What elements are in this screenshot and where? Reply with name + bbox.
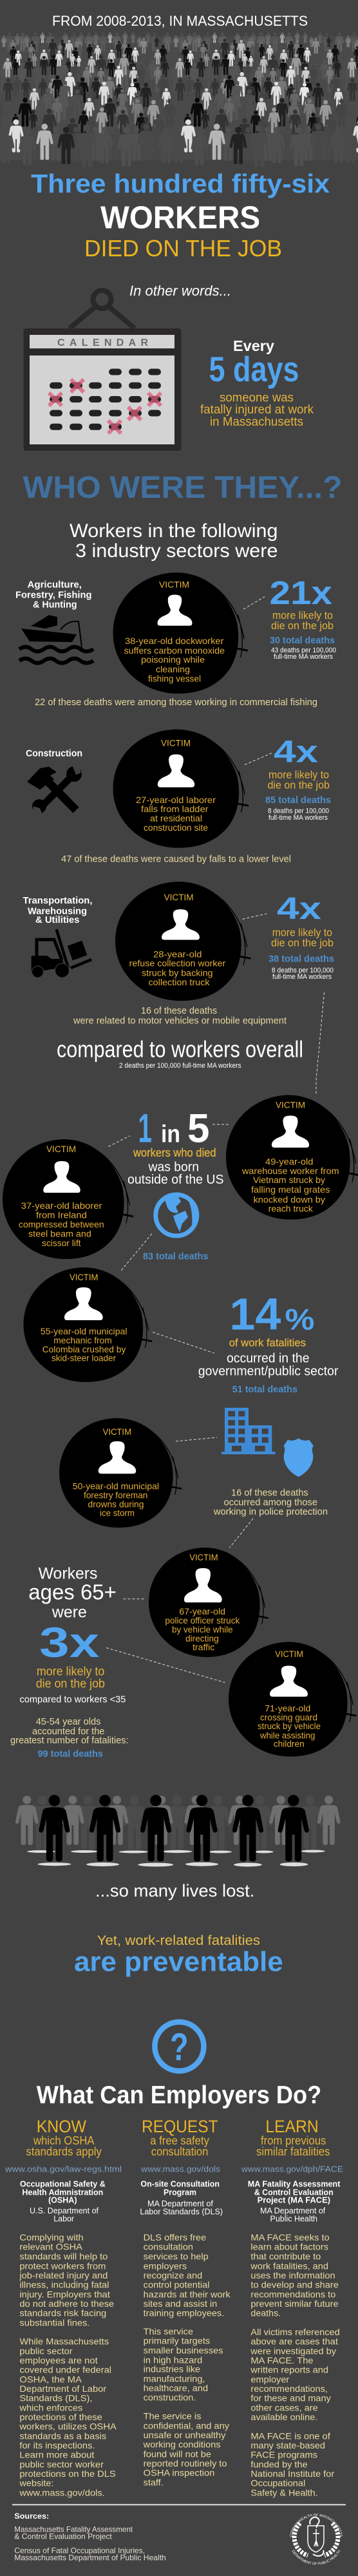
panel: victim warehouse worker: Vietnam struck by <box>253 1175 325 1185</box>
text: OSHA body copy: public sector <box>19 2345 73 2356</box>
text: DLS body copy: healthcare, and <box>144 2383 208 2393</box>
stat: 1 in 5 workers born outside the US: in <box>161 1121 180 1148</box>
heading: from 2008-2013: FROM 2008-2013, IN MASSACHUSETTS <box>52 13 308 29</box>
stat: 1 in 5 workers born outside the US: 1 <box>138 1106 152 1151</box>
stat: 14 percent public sector <box>198 1289 339 1395</box>
text: MA FACE body copy: prevent similar future <box>250 2298 339 2309</box>
text: sources: Massachusetts Fatality Assessment <box>14 2524 133 2533</box>
text: DLS body copy: found will not be <box>144 2448 211 2459</box>
panel: request free safety consultation: REQUEST <box>142 2117 218 2136</box>
stat: 4x transportation: full-time MA workers <box>272 973 332 981</box>
panel: learn from previous fatalities: similar fatalities <box>256 2145 330 2158</box>
stat: 1 in 5 workers born outside the US: 5 <box>187 1106 210 1151</box>
text: OSHA body copy: employees are not <box>19 2355 98 2365</box>
text: OSHA body copy: standards risk facing <box>19 2308 106 2318</box>
text: OSHA body copy <box>19 2232 117 2497</box>
heading: workers in the following 3 industry sectors were: Workers in the following <box>70 520 278 542</box>
panel: victim warehouse worker: VICTIM <box>276 1100 305 1110</box>
panel: victim crossing guard <box>229 1642 357 1757</box>
text: MA FACE body copy: FACE programs <box>250 2450 317 2460</box>
panel: learn from previous fatalities: www.mass.gov/dph/FACE <box>241 2164 343 2174</box>
panel: victim police officer: by vehicle while <box>172 1624 233 1634</box>
label: construction: Construction <box>26 748 82 759</box>
stat: 4x construction: 8 deaths per 100,000 <box>268 808 329 815</box>
text: OSHA body copy: relevant OSHA <box>19 2242 83 2252</box>
panel: victim refuse collector: 28-year-old <box>153 949 202 960</box>
panel: learn from previous fatalities: MA Department of <box>260 2206 326 2215</box>
text: DLS body copy: hazards at their work <box>144 2289 231 2299</box>
panel: request free safety consultation: a free safety <box>150 2134 209 2147</box>
text: DLS body copy: control potential <box>144 2280 210 2290</box>
panel: victim dockworker: fishing vessel <box>148 674 201 684</box>
panel: victim municipal mechanic: Colombia crushed by <box>42 1344 126 1354</box>
text: MA FACE body copy: for these and many <box>250 2393 331 2403</box>
text: sources: Census of Fatal Occupational Injuries, <box>14 2546 145 2555</box>
stat: 4x transportation: 8 deaths per 100,000 <box>272 967 334 974</box>
panel: victim crossing guard: 71-year-old <box>265 1703 310 1713</box>
illustration: row of standing figures <box>15 1795 340 1866</box>
panel: victim municipal mechanic: VICTIM <box>70 1273 98 1282</box>
stat: workers ages 65+ were 3x: Workers <box>39 1565 97 1583</box>
panel: victim police officer <box>149 1548 268 1657</box>
text: in other words: In other words... <box>129 283 231 299</box>
panel: victim laborer: VICTIM <box>161 738 191 748</box>
panel: victim laborer: construction site <box>144 822 208 833</box>
panel: victim crossing guard: crossing guard <box>260 1712 317 1722</box>
stat: workers ages 65+ were 3x: were <box>52 1603 87 1621</box>
panel: request free safety consultation: On-site Consultation <box>140 2180 220 2189</box>
panel: know OSHA standards: Labor <box>53 2215 74 2224</box>
text: OSHA body copy: www.mass.gov/dols. <box>19 2487 105 2497</box>
panel: victim laborer from Ireland <box>3 1139 133 1259</box>
text: MA FACE body copy: Occupational <box>250 2478 305 2488</box>
label: agriculture, forestry, fishing and hunting: Forestry, Fishing <box>15 590 91 601</box>
callout: every 5 days: in Massachusetts <box>210 415 303 429</box>
panel: victim forestry foreman: 50-year-old municipal <box>73 1481 159 1492</box>
text: OSHA body copy: which enforces <box>19 2402 82 2412</box>
text: DLS body copy: OSHA inspection <box>144 2468 214 2478</box>
heading: compared to workers overall <box>57 1036 303 1070</box>
text: DLS body copy: construction. <box>144 2392 196 2403</box>
text: motor vehicle note: were related to motor vehicles or mobile equipment <box>73 1015 287 1026</box>
panel: victim refuse collector: collection truck <box>148 977 211 987</box>
panel: know OSHA standards: standards apply <box>26 2145 102 2158</box>
text: OSHA body copy: OSHA, the MA <box>19 2374 82 2384</box>
text: MA FACE body copy: to develop and share <box>250 2280 339 2290</box>
arrow: dashed connector <box>245 753 272 765</box>
text: OSHA body copy: protections on the DLS <box>19 2468 116 2479</box>
heading: who were they: WHO WERE THEY...? <box>23 471 343 505</box>
arrow: dashed connector <box>229 1519 253 1548</box>
panel: victim police officer: VICTIM <box>189 1553 218 1562</box>
stat: 1 in 5 workers born outside the US: was born <box>148 1160 199 1175</box>
text: police protection note: occurred among those <box>224 1497 317 1508</box>
panel: victim refuse collector: struck by backing <box>142 967 212 978</box>
panel: learn from previous fatalities: Public Health <box>270 2215 317 2224</box>
panel: victim laborer from Ireland: steel beam and <box>28 1228 91 1238</box>
title: three hundred fifty-six workers died on the job: WORKERS <box>100 201 260 236</box>
panel: victim police officer: 67-year-old <box>179 1606 225 1616</box>
panel: know OSHA standards: U.S. Department of <box>30 2206 99 2215</box>
stat: 21x more likely <box>269 574 336 661</box>
icon: question mark circle <box>155 2022 203 2071</box>
panel: victim refuse collector: refuse collection worker <box>129 958 226 969</box>
stat: 4x transportation: 4x <box>277 892 321 926</box>
label: agriculture, forestry, fishing and hunting <box>15 580 91 611</box>
stat: workers ages 65+ were 3x: compared to workers <35 <box>19 1694 126 1705</box>
text: MA FACE body copy: available online. <box>250 2412 317 2422</box>
text: falls note: 47 of these deaths were caused by falls to a lower level <box>61 854 291 864</box>
panel: victim warehouse worker: warehouse worker from <box>241 1166 339 1176</box>
text: DLS body copy: consultation <box>144 2242 193 2252</box>
label: transportation, warehousing and utilities: Transportation, <box>23 895 93 906</box>
text: OSHA body copy: injury. Employers that <box>19 2289 110 2299</box>
panel: request free safety consultation: www.mass.gov/dols <box>140 2164 221 2174</box>
panel: victim dockworker: 38-year-old dockworker <box>125 636 224 646</box>
text: OSHA body copy: illness, including fatal <box>19 2280 109 2290</box>
stat: 4x transportation: more likely to <box>272 926 332 938</box>
panel: victim laborer from Ireland: 37-year-old laborer <box>21 1200 102 1211</box>
panel: know OSHA standards <box>5 2117 122 2497</box>
panel: learn from previous fatalities: MA Fatality Assessment <box>248 2180 341 2189</box>
heading: compared to workers overall: compared to workers overall <box>57 1036 303 1063</box>
panel: victim dockworker <box>113 573 248 694</box>
text: motor vehicle note: 16 of these deaths <box>141 1005 217 1016</box>
text: police protection note: working in police protection <box>213 1506 328 1517</box>
illustration: crowd of workers <box>0 28 358 167</box>
stat: 14 percent public sector: 14 <box>229 1289 281 1340</box>
callout: every 5 days: Every <box>233 337 274 354</box>
text: DLS body copy: staff. <box>144 2477 164 2487</box>
stat: 1 in 5 workers born outside the US: workers who died <box>133 1146 216 1159</box>
stat: workers ages 65+ were 3x: 45-54 year olds <box>36 1716 100 1727</box>
panel: learn from previous fatalities <box>241 2117 343 2497</box>
text: MA FACE body copy: funded by the <box>250 2459 308 2469</box>
stat: workers ages 65+ were 3x: 3x <box>39 1618 100 1666</box>
panel: learn from previous fatalities: LEARN <box>265 2117 319 2136</box>
stat: 4x construction <box>265 735 331 822</box>
text: MA FACE body copy: All victims referenced <box>250 2327 340 2337</box>
panel: victim municipal mechanic <box>23 1267 152 1382</box>
text: so many lives lost: ...so many lives lost. <box>95 1881 254 1900</box>
label: agriculture, forestry, fishing and hunting: & Hunting <box>33 600 77 611</box>
text: OSHA body copy: substantial fines. <box>19 2317 90 2327</box>
text: OSHA body copy: standards will help to <box>19 2251 108 2261</box>
text: sources: Sources: <box>14 2512 49 2521</box>
icon: globe <box>156 1193 197 1236</box>
stat: workers ages 65+ were 3x: accounted for the <box>32 1726 104 1737</box>
text: DLS body copy: sites and assist in <box>144 2298 217 2309</box>
panel: victim crossing guard: while assisting <box>259 1730 315 1740</box>
text: MA FACE body copy: other cases, are <box>250 2402 318 2412</box>
icon: fishing boat <box>19 615 93 663</box>
icon: department of public health seal <box>290 2514 343 2565</box>
icon: government building <box>221 1408 276 1454</box>
panel: know OSHA standards: www.osha.gov/law-regs.html <box>5 2164 122 2174</box>
icon: forklift <box>32 929 91 978</box>
stat: 1 in 5 workers born outside the US: outside of the US <box>127 1173 224 1187</box>
panel: victim forestry foreman: forestry foreman <box>84 1490 147 1500</box>
heading: what can employers do: What Can Employers Do? <box>37 2081 321 2109</box>
text: OSHA body copy: protections of these <box>19 2412 102 2422</box>
panel: victim dockworker: suffers carbon monoxide <box>124 645 225 656</box>
icon: department of public health seal: COMMONWEALTH OF MASSACHUSETTS <box>290 2514 343 2537</box>
stat: 1 in 5 workers born outside the US <box>127 1106 224 1187</box>
text: MA FACE body copy: were investigated by <box>250 2345 336 2356</box>
stat: 21x more likely: full-time MA workers <box>274 653 333 661</box>
panel: learn from previous fatalities: & Control Evaluation <box>254 2188 334 2197</box>
panel: victim dockworker: poisoning while <box>141 654 205 665</box>
stat: 14 percent public sector: % <box>285 1303 314 1336</box>
icon: wall calendar <box>23 290 182 451</box>
text: OSHA body copy: Standards (DLS), <box>19 2393 92 2403</box>
text: MA FACE body copy: MA FACE is one of <box>250 2430 330 2441</box>
text: MA FACE body copy: National Institute for <box>250 2468 335 2479</box>
panel: victim warehouse worker: 49-year-old <box>265 1157 313 1167</box>
panel: know OSHA standards: Health Admnistration <box>22 2188 103 2197</box>
panel: know OSHA standards: Occupational Safety & <box>20 2180 106 2189</box>
text: DLS body copy: training employees. <box>144 2308 224 2318</box>
callout: every 5 days: 5 days <box>209 349 299 389</box>
text: MA FACE body copy: that contribute to <box>250 2251 321 2261</box>
arrow: dashed connectors around 1 in 5 <box>108 1124 229 1271</box>
text: sources <box>14 2512 166 2562</box>
icon: question mark circle: ? <box>170 2025 189 2069</box>
text: DLS body copy: in high hazard <box>144 2354 202 2365</box>
panel: victim dockworker: cleaning <box>156 664 190 674</box>
stat: 4x construction: 4x <box>274 735 318 769</box>
panel: victim forestry foreman <box>59 1418 182 1528</box>
text: 83 total deaths: 83 total deaths <box>143 1251 208 1262</box>
text: DLS body copy: DLS offers free <box>144 2232 206 2242</box>
stat: workers ages 65+ were 3x: die on the job <box>36 1678 105 1691</box>
stat: 14 percent public sector: government/public sector <box>198 1364 339 1378</box>
stat: 21x more likely: 30 total deaths <box>270 635 335 646</box>
panel: victim municipal mechanic: 55-year-old municipal <box>41 1326 127 1336</box>
text: MA FACE body copy: written reports and <box>250 2365 328 2375</box>
panel: victim police officer: police officer struck <box>165 1615 240 1625</box>
panel: victim laborer from Ireland: VICTIM <box>46 1144 76 1154</box>
panel: request free safety consultation: Labor Standards (DLS) <box>140 2207 223 2216</box>
text: OSHA body copy: workers, utilizes OSHA <box>19 2421 117 2432</box>
panel: victim forestry foreman: ice storm <box>100 1508 135 1518</box>
text: MA FACE body copy: Safety & Health. <box>250 2487 318 2497</box>
text: MA FACE body copy: deaths. <box>250 2308 281 2318</box>
panel: victim municipal mechanic: skid-steer loader <box>52 1352 116 1363</box>
panel: victim police officer: traffic <box>193 1642 214 1652</box>
text: MA FACE body copy: many state-based <box>250 2440 325 2450</box>
stat: 14 percent public sector: of work fatalities <box>229 1337 306 1349</box>
text: DLS body copy: confidential, and any <box>144 2420 229 2430</box>
text: OSHA body copy: covered under federal <box>19 2365 111 2375</box>
panel: victim dockworker: VICTIM <box>159 580 189 590</box>
stat: 21x more likely: 21x <box>269 574 332 611</box>
panel: victim crossing guard: VICTIM <box>275 1649 303 1659</box>
text: MA FACE body copy <box>250 2232 340 2497</box>
text: DLS body copy: manufacturing, <box>144 2373 205 2383</box>
arrow: dashed connectors from ages 65+ <box>106 1599 225 1683</box>
panel: request free safety consultation <box>140 2117 231 2487</box>
text: MA FACE body copy: recommendations, <box>250 2383 328 2394</box>
text: commercial fishing note: 22 of these deaths were among those working in commercial fishing <box>35 697 317 708</box>
stat: 21x more likely: die on the job <box>271 620 334 632</box>
stat: workers ages 65+ were 3x: 99 total deaths <box>37 1748 103 1759</box>
panel: learn from previous fatalities: Project (MA FACE) <box>258 2196 330 2205</box>
stat: workers ages 65+ were 3x: greatest number of fatalities: <box>10 1735 129 1746</box>
text: DLS body copy: The service is <box>144 2411 201 2421</box>
panel: victim warehouse worker <box>226 1095 358 1220</box>
stat: 4x transportation: die on the job <box>271 936 334 949</box>
panel: know OSHA standards: which OSHA <box>33 2134 94 2147</box>
text: OSHA body copy: protect workers from <box>19 2260 106 2271</box>
panel: victim forestry foreman: drowns during <box>88 1499 144 1509</box>
text: OSHA body copy: Complying with <box>19 2232 84 2242</box>
panel: victim laborer from Ireland: scissor lift <box>42 1238 81 1248</box>
text: DLS body copy: unsafe or unhealthy <box>144 2430 225 2440</box>
text: DLS body copy: employers <box>144 2260 187 2271</box>
stat: 4x construction: 85 total deaths <box>265 795 331 806</box>
panel: victim warehouse worker: knocked down by <box>254 1194 325 1204</box>
text: DLS body copy: This service <box>144 2326 193 2336</box>
stat: 21x more likely: 43 deaths per 100,000 <box>271 647 336 654</box>
title: three hundred fifty-six workers died on the job: Three hundred fifty-six <box>31 169 330 198</box>
stat: 4x transportation: 38 total deaths <box>268 954 334 965</box>
heading: fatalities are preventable: are preventable <box>74 1947 283 1978</box>
text: MA FACE body copy: learn about factors <box>250 2242 328 2252</box>
panel: know OSHA standards: KNOW <box>37 2117 86 2136</box>
icon: wall calendar: CALENDAR <box>57 337 148 348</box>
label: transportation, warehousing and utilities: Warehousing <box>28 905 87 916</box>
arrow: dashed connector <box>243 597 265 609</box>
text: MA FACE body copy: above are cases that <box>250 2336 338 2347</box>
text: MA FACE body copy: recommendations to <box>250 2289 336 2299</box>
text: MA FACE body copy: work fatalities, and <box>250 2260 328 2271</box>
panel: victim crossing guard: struck by vehicle <box>258 1721 321 1731</box>
heading: fatalities are preventable <box>74 1933 283 1978</box>
panel: victim laborer: falls from ladder <box>141 804 209 814</box>
label: transportation, warehousing and utilities: & Utilities <box>35 914 79 925</box>
icon: hammer and wrench <box>27 765 82 815</box>
text: OSHA body copy: public sector worker <box>19 2459 104 2469</box>
stat: 4x construction: die on the job <box>268 779 330 791</box>
stat: 4x construction: full-time MA workers <box>268 814 328 822</box>
label: agriculture, forestry, fishing and hunting: Agriculture, <box>27 580 82 590</box>
text: MA FACE body copy: employer <box>250 2374 290 2384</box>
text: DLS body copy: smaller businesses <box>144 2345 223 2355</box>
arrow: dashed connector <box>153 1332 214 1353</box>
text: DLS body copy: primarily targets <box>144 2336 210 2346</box>
callout: every 5 days: fatally injured at work <box>200 403 314 417</box>
text: police protection note <box>213 1488 328 1517</box>
text: DLS body copy: reported routinely to <box>144 2458 227 2468</box>
stat: 4x construction: more likely to <box>268 769 329 781</box>
panel: victim refuse collector: VICTIM <box>164 893 194 902</box>
text: OSHA body copy: While Massachusetts <box>19 2336 109 2347</box>
panel: victim refuse collector <box>115 882 251 1001</box>
arrow: dashed connector <box>243 914 267 919</box>
arrow: dashed connector <box>176 1437 217 1441</box>
stat: workers ages 65+ were 3x: more likely to <box>37 1665 104 1678</box>
panel: request free safety consultation: consultation <box>151 2145 208 2158</box>
text: OSHA body copy: website: <box>19 2478 53 2488</box>
panel: victim laborer from Ireland: compressed between <box>19 1219 104 1229</box>
icon: department of public health seal: DEPARTMENT OF PUBLIC HEALTH <box>292 2550 340 2565</box>
stat: workers ages 65+ were 3x <box>10 1565 129 1759</box>
callout: every 5 days <box>200 337 314 429</box>
text: OSHA body copy: standards as a basis <box>19 2430 106 2441</box>
text: MA FACE body copy: uses the information <box>250 2270 335 2280</box>
text: sources: & Control Evaluation Project <box>14 2532 112 2541</box>
text: DLS body copy: recognize and <box>144 2270 202 2280</box>
heading: fatalities are preventable: Yet, work-related fatalities <box>97 1933 260 1948</box>
text: sources: Massachusetts Department of Public Health <box>14 2553 166 2562</box>
text: motor vehicle note <box>73 1005 287 1026</box>
stat: 14 percent public sector: 51 total deaths <box>232 1384 297 1395</box>
heading: compared to workers overall: 2 deaths per 100,000 full-time MA workers <box>119 1062 241 1070</box>
arrow: dashed vertical connector <box>316 992 325 1094</box>
text: DLS body copy <box>143 2232 231 2487</box>
panel: request free safety consultation: MA Department of <box>147 2199 213 2208</box>
stat: workers ages 65+ were 3x: ages 65+ <box>28 1580 117 1604</box>
text: DLS body copy: industries like <box>144 2364 200 2374</box>
panel: victim forestry foreman: VICTIM <box>103 1427 131 1437</box>
panel: victim warehouse worker: falling metal grates <box>251 1184 330 1195</box>
text: MA FACE body copy: MA FACE. The <box>250 2355 314 2365</box>
text: OSHA body copy: for its inspections. <box>19 2440 95 2450</box>
stat: 14 percent public sector: occurred in the <box>227 1352 309 1366</box>
panel: victim warehouse worker: reach truck <box>268 1203 314 1213</box>
heading: workers in the following 3 industry sectors were: 3 industry sectors were <box>75 540 278 562</box>
title: three hundred fifty-six workers died on the job: DIED ON THE JOB <box>84 235 282 261</box>
title: three hundred fifty-six workers died on the job <box>31 169 330 261</box>
stat: 4x transportation <box>268 892 334 981</box>
panel: victim laborer: 27-year-old laborer <box>136 795 216 805</box>
panel: victim laborer from Ireland: from Ireland <box>36 1209 87 1220</box>
heading: workers in the following 3 industry sectors were <box>70 520 278 562</box>
text: MA FACE body copy: MA FACE seeks to <box>250 2232 330 2242</box>
text: DLS body copy: working conditions <box>143 2439 221 2450</box>
panel: victim laborer: at residential <box>150 813 202 824</box>
panel: request free safety consultation: Program <box>164 2188 196 2197</box>
text: OSHA body copy: do not adhere to these <box>19 2298 114 2309</box>
icon: police shield <box>284 1438 314 1477</box>
text: DLS body copy: services to help <box>144 2251 209 2261</box>
text: OSHA body copy: Department of Labor <box>19 2383 107 2394</box>
text: OSHA body copy: Learn more about <box>19 2450 95 2460</box>
panel: know OSHA standards: (OSHA) <box>48 2196 77 2205</box>
panel: victim crossing guard: children <box>274 1738 305 1748</box>
panel: victim police officer: directing <box>185 1633 219 1643</box>
panel: victim laborer <box>113 729 249 848</box>
panel: learn from previous fatalities: from previous <box>261 2134 326 2147</box>
callout: every 5 days: someone was <box>220 392 294 404</box>
label: transportation, warehousing and utilities <box>23 895 93 925</box>
text: OSHA body copy: job-related injury and <box>19 2270 108 2280</box>
text: police protection note: 16 of these deaths <box>231 1488 308 1499</box>
panel: victim municipal mechanic: mechanic from <box>53 1335 112 1345</box>
stat: 21x more likely: more likely to <box>272 609 333 621</box>
